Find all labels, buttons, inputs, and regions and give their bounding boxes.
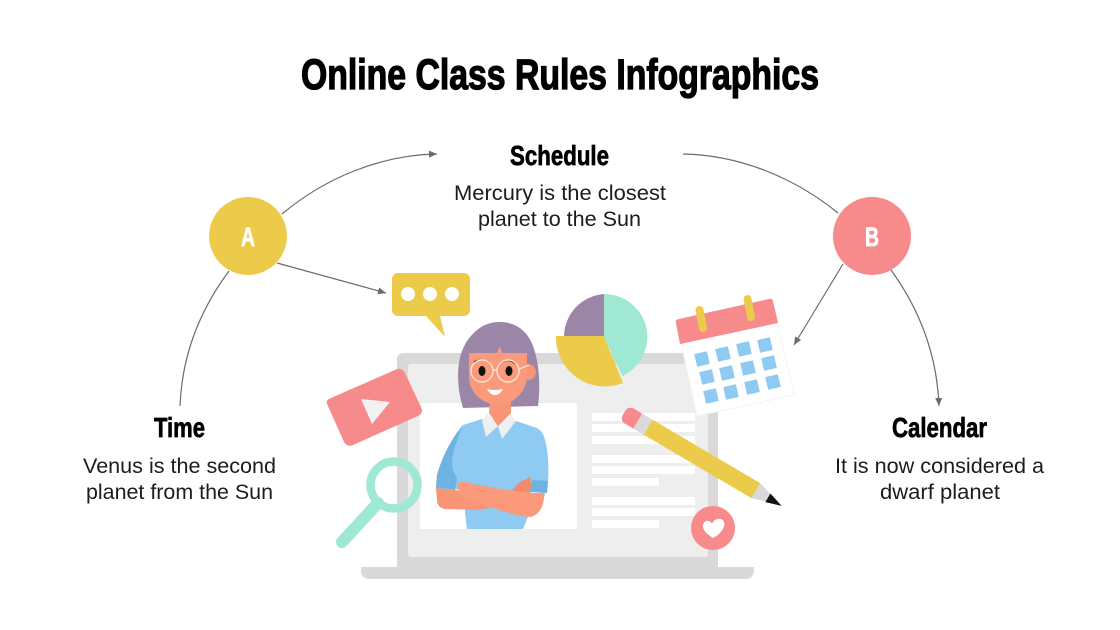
text lines on laptop screen bbox=[592, 413, 695, 528]
laptop bbox=[361, 353, 754, 579]
badge B bbox=[833, 197, 911, 275]
icon: pencil bbox=[620, 406, 786, 513]
arrow: A to Schedule bbox=[282, 154, 437, 214]
badge A bbox=[209, 197, 287, 275]
collar bbox=[482, 413, 516, 439]
text block: Time: planet from the Sun bbox=[86, 481, 273, 504]
icon: video player bbox=[327, 369, 422, 446]
ear bbox=[520, 364, 536, 380]
arrow: A to Time bbox=[180, 271, 229, 406]
text block: Schedule bbox=[454, 140, 666, 231]
arrow: A to speech bubble bbox=[277, 263, 386, 293]
arrow: B to Calendar bbox=[891, 270, 939, 406]
right sleeve bbox=[530, 480, 548, 493]
text block: Calendar: dwarf planet bbox=[880, 481, 1000, 504]
text block: Schedule: planet to the Sun bbox=[478, 208, 641, 231]
text block: Time: Time bbox=[154, 412, 205, 443]
icon: speech bubble bbox=[392, 273, 470, 337]
text block: Calendar: It is now considered a bbox=[835, 455, 1044, 478]
text block: Calendar: Calendar bbox=[892, 412, 987, 443]
face bbox=[469, 346, 527, 405]
calendar day squares bbox=[694, 337, 781, 404]
icon: heart badge bbox=[691, 506, 735, 550]
eyes bbox=[474, 360, 516, 376]
icon: magnifying glass bbox=[342, 462, 418, 542]
hair bbox=[458, 322, 539, 408]
illustration: woman bbox=[436, 322, 548, 529]
arrow: B to calendar icon bbox=[794, 264, 843, 345]
hand bbox=[512, 477, 533, 494]
text block: Schedule: Schedule bbox=[510, 140, 609, 171]
front forearm bbox=[457, 481, 545, 517]
arrow: Schedule to B bbox=[683, 154, 838, 213]
glasses bbox=[471, 360, 529, 382]
badge A: A bbox=[241, 222, 255, 252]
shirt bbox=[436, 419, 548, 529]
icon: calendar bbox=[676, 299, 794, 416]
mouth bbox=[487, 389, 503, 395]
text block: Time bbox=[83, 412, 276, 504]
title: Online Class Rules Infographics bbox=[301, 51, 819, 99]
left forearm bbox=[436, 488, 495, 510]
text block: Calendar bbox=[835, 412, 1044, 504]
sleeve shading bbox=[436, 425, 463, 490]
badge B: B bbox=[865, 222, 879, 252]
text block: Schedule: Mercury is the closest bbox=[454, 182, 666, 205]
text block: Time: Venus is the second bbox=[83, 455, 276, 478]
chart: pie bbox=[556, 294, 647, 386]
neck bbox=[489, 400, 511, 426]
